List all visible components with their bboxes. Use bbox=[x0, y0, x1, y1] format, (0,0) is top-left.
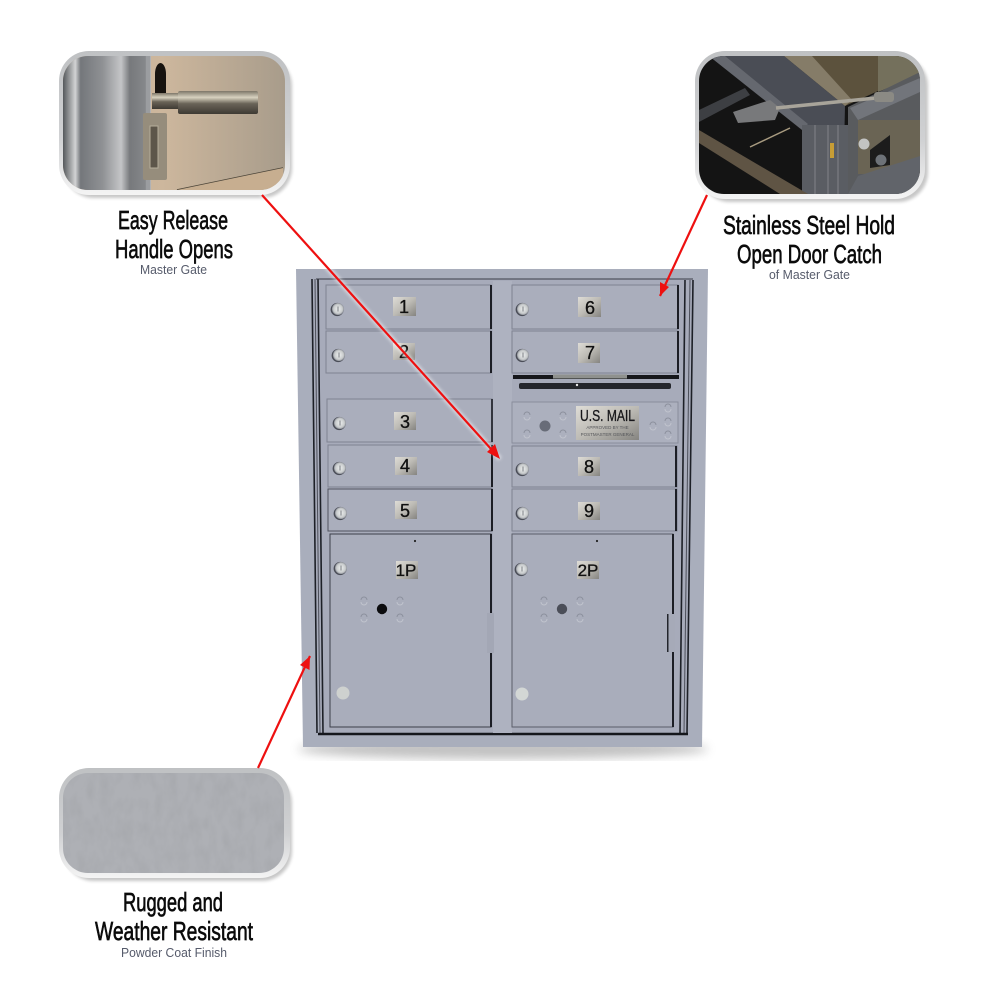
left door 4: 4 bbox=[400, 456, 410, 476]
heading: door catch bbox=[723, 210, 895, 282]
heading: door catch: of Master Gate bbox=[769, 268, 850, 282]
left door 2 bbox=[326, 331, 492, 373]
mailbox unit bbox=[296, 269, 708, 759]
arrow: handle to center post bbox=[262, 195, 500, 459]
u.s. mail panel: U.S. MAIL bbox=[580, 408, 635, 425]
u.s. mail panel bbox=[512, 402, 678, 443]
parcel door 1P: 1P bbox=[396, 561, 416, 580]
photo callout: door catch bbox=[695, 51, 928, 202]
left door 5 bbox=[328, 489, 493, 531]
u.s. mail panel: APPROVED BY THE bbox=[586, 425, 629, 430]
right door 6 bbox=[512, 285, 679, 329]
left door 4 bbox=[328, 445, 493, 487]
outgoing mail slot bbox=[513, 374, 679, 389]
heading: easy release: Master Gate bbox=[140, 263, 207, 277]
photo callout: powder coat bbox=[59, 768, 292, 881]
heading: rugged: Weather Resistant bbox=[95, 916, 254, 946]
parcel door 2P bbox=[512, 534, 675, 727]
right door 8 bbox=[512, 446, 677, 487]
heading: door catch: Stainless Steel Hold bbox=[723, 210, 895, 240]
heading: rugged bbox=[95, 887, 254, 960]
right door 6: 6 bbox=[585, 298, 595, 318]
right door 9 bbox=[512, 489, 677, 531]
heading: easy release bbox=[115, 205, 233, 277]
parcel door 2P: 2P bbox=[578, 561, 598, 580]
arrow: catch to door 6 bbox=[660, 195, 707, 296]
left door 2: 2 bbox=[399, 342, 409, 362]
heading: easy release: Handle Opens bbox=[115, 234, 233, 264]
right door 9: 9 bbox=[584, 501, 594, 521]
infographic bbox=[59, 51, 930, 957]
heading: easy release: Easy Release bbox=[118, 205, 228, 235]
right door 8: 8 bbox=[584, 457, 594, 477]
left door 3 bbox=[327, 399, 493, 442]
right door 7: 7 bbox=[585, 343, 595, 363]
heading: rugged: Rugged and bbox=[123, 887, 223, 917]
arrow: finish to side frame bbox=[258, 656, 310, 768]
u.s. mail panel: POSTMASTER GENERAL bbox=[581, 432, 635, 437]
left door 5: 5 bbox=[400, 501, 410, 521]
parcel door 1P bbox=[330, 534, 494, 727]
photo callout: handle bbox=[59, 51, 292, 198]
right door 7 bbox=[512, 331, 679, 373]
left door 3: 3 bbox=[400, 412, 410, 432]
left door 1 bbox=[326, 285, 492, 329]
left door 1: 1 bbox=[399, 297, 409, 317]
heading: door catch: Open Door Catch bbox=[737, 239, 882, 269]
heading: rugged: Powder Coat Finish bbox=[121, 946, 227, 960]
